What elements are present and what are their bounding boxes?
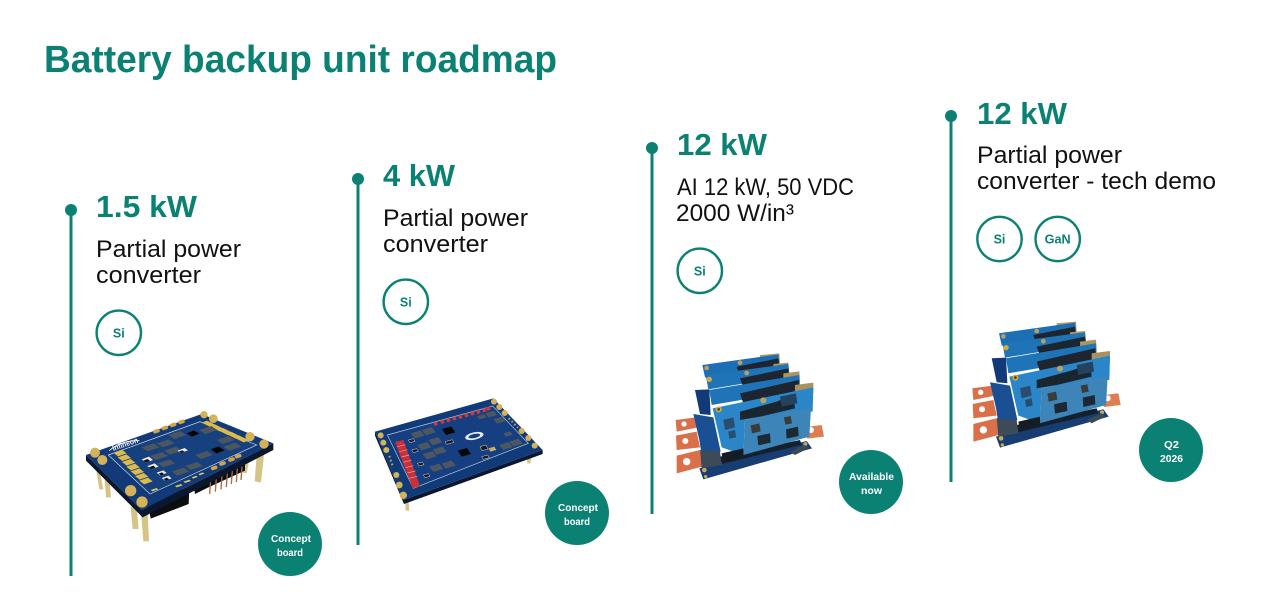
description: converter [96, 262, 201, 289]
status badge: Q2 2026: Q2 [1164, 439, 1179, 451]
description: AI 12 kW, 50 VDC [677, 174, 854, 201]
status badge: available now: now [861, 485, 883, 497]
description: converter [383, 231, 488, 258]
status badge: concept board: Concept [271, 533, 311, 545]
status badge: available now [839, 450, 903, 514]
technology tag: Si: Si [994, 233, 1005, 247]
panel: 12 kW tech demo [945, 96, 1216, 482]
timeline marker 1 [65, 204, 77, 576]
description: Partial power [977, 142, 1122, 169]
technology tag: GaN [1036, 217, 1080, 261]
image: stacked converter cards [972, 322, 1121, 448]
status badge: concept board: Concept [558, 502, 598, 514]
technology tag: Si [977, 217, 1022, 261]
status badge: concept board [545, 481, 609, 545]
technology tag: Si: Si [113, 326, 125, 340]
panel: 4 kW partial power converter [352, 158, 609, 545]
description [676, 174, 854, 227]
image: concept board [375, 398, 543, 511]
technology tag: Si [384, 280, 428, 324]
heading: 12 kW: 12 kW [977, 96, 1068, 131]
panel: 1.5 kW partial power converter [65, 189, 322, 576]
description [96, 236, 241, 289]
board logo: Infineon [111, 436, 139, 453]
status badge: Q2 2026: 2026 [1160, 453, 1183, 465]
technology tag: Si [97, 311, 141, 355]
status badge: concept board: board [277, 547, 303, 559]
status badge: available now: Available [849, 471, 894, 483]
technology tag: Si: Si [694, 264, 706, 278]
timeline marker 2 [352, 173, 364, 545]
technology tag: Si [678, 249, 722, 293]
status badge: Q2 2026 [1139, 418, 1203, 482]
description: 2000 W/in³ [676, 200, 794, 227]
status badge: concept board [258, 512, 322, 576]
image: concept board [86, 411, 273, 541]
image: stacked converter cards [676, 353, 824, 479]
technology tag: Si: Si [400, 296, 412, 310]
description [383, 205, 528, 258]
description: Partial power [96, 236, 241, 263]
description: Partial power [383, 205, 528, 232]
timeline marker 3 [646, 142, 658, 514]
status badge: concept board: board [564, 516, 590, 528]
timeline marker 4 [945, 110, 957, 482]
heading: 1.5 kW: 1.5 kW [96, 189, 198, 224]
technology tag: GaN: GaN [1045, 233, 1071, 247]
description: converter - tech demo [977, 168, 1216, 195]
panel: 12 kW AI converter [646, 127, 903, 514]
heading: 12 kW: 12 kW [677, 127, 768, 162]
title: Battery backup unit roadmap [44, 39, 557, 81]
heading: 4 kW: 4 kW [383, 158, 456, 193]
description [977, 142, 1216, 195]
